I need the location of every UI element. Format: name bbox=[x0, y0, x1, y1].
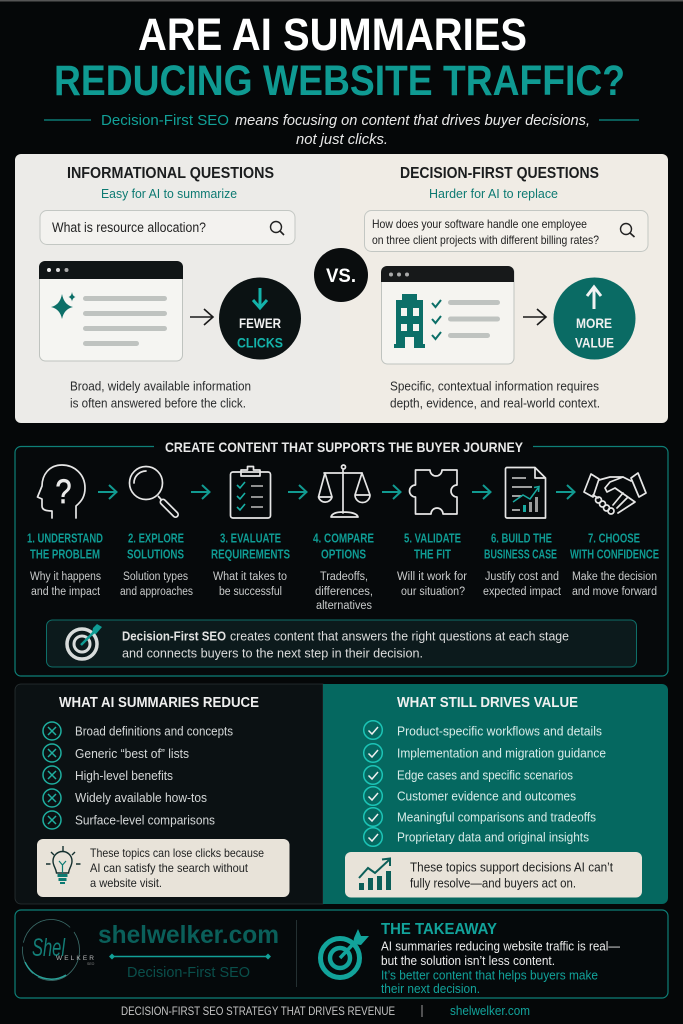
footer: DECISION-FIRST SEO STRATEGY THAT DRIVES REVENUE bbox=[121, 1004, 395, 1018]
panel: decision-first questions bbox=[340, 154, 668, 423]
subtitle: Decision-First SEO bbox=[101, 112, 229, 129]
subtitle: means focusing on content that drives buyer decisions, bbox=[235, 112, 590, 129]
step 1: THE PROBLEM bbox=[30, 548, 100, 562]
step 4: OPTIONS bbox=[321, 548, 366, 562]
arrow: step 4 to 5 bbox=[382, 485, 400, 499]
arrow: to more value bbox=[523, 309, 546, 325]
step 7: 7. CHOOSE bbox=[588, 532, 640, 546]
takeaway text: AI summaries reducing website traffic is real— bbox=[381, 938, 620, 954]
step 5: our situation? bbox=[401, 586, 465, 598]
panel: what still drives value bbox=[323, 684, 668, 904]
arrow: step 1 to 2 bbox=[98, 485, 116, 499]
browser window: specific content bbox=[381, 266, 514, 364]
heading: reduce: WHAT AI SUMMARIES REDUCE bbox=[59, 695, 259, 711]
logo: Shel Welker: Shel bbox=[32, 934, 66, 962]
step 6: Justify cost and bbox=[485, 571, 559, 583]
text: decision-first note: depth, evidence, and real-world context. bbox=[390, 396, 600, 410]
callout: lose clicks bbox=[37, 839, 290, 897]
list: value items bbox=[364, 721, 606, 846]
step 7: Make the decision bbox=[572, 571, 657, 583]
step 5: THE FIT bbox=[414, 548, 451, 562]
panel: buyer journey bbox=[15, 439, 668, 676]
list: reduced items: Broad definitions and concepts bbox=[75, 724, 233, 738]
step 1: Why it happens bbox=[30, 571, 101, 583]
icon: head with question mark: ? bbox=[56, 473, 72, 511]
search box: decision-first: on three client projects with different billing rates? bbox=[372, 233, 599, 247]
callout: decision-first SEO: and connects buyers to the next step in their decision. bbox=[122, 646, 423, 660]
subheading: harder: Harder for AI to replace bbox=[429, 186, 558, 201]
list: value items: Meaningful comparisons and tradeoffs bbox=[397, 810, 596, 824]
heading: buyer journey: CREATE CONTENT THAT SUPPORTS THE BUYER JOURNEY bbox=[165, 439, 524, 455]
arrow: step 3 to 4 bbox=[288, 485, 306, 499]
callout: decision-first SEO bbox=[46, 620, 636, 667]
panel: informational questions bbox=[15, 154, 340, 423]
step 2: and approaches bbox=[120, 586, 193, 598]
step 7: and move forward bbox=[572, 586, 657, 598]
icon: balance scale bbox=[318, 465, 370, 517]
step 4 bbox=[313, 532, 374, 612]
panel: takeaway banner bbox=[15, 910, 668, 998]
step 2 bbox=[120, 532, 193, 598]
badge: fewer clicks: CLICKS bbox=[237, 334, 283, 350]
step 3: REQUIREMENTS bbox=[211, 548, 290, 562]
takeaway text: their next decision. bbox=[381, 981, 480, 996]
takeaway text: It’s better content that helps buyers make bbox=[381, 968, 598, 982]
callout: support decisions: These topics support decisions AI can’t bbox=[410, 860, 613, 874]
step 5 bbox=[397, 532, 467, 598]
badge: fewer clicks bbox=[219, 278, 301, 360]
badge: fewer clicks: FEWER bbox=[239, 315, 281, 331]
takeaway text bbox=[381, 921, 620, 996]
step 3: 3. EVALUATE bbox=[220, 532, 281, 546]
list: reduced items bbox=[43, 722, 233, 829]
list: value items: Proprietary data and original insights bbox=[397, 830, 589, 844]
takeaway text: but the solution isn’t less content. bbox=[381, 953, 555, 968]
takeaway text: THE TAKEAWAY bbox=[381, 921, 497, 938]
icon: takeaway target bbox=[320, 929, 369, 978]
step 4: 4. COMPARE bbox=[313, 532, 374, 546]
step 5: 5. VALIDATE bbox=[404, 532, 461, 546]
divider line with diamonds bbox=[109, 954, 271, 960]
callout: lose clicks: These topics can lose clicks because bbox=[90, 846, 264, 860]
badge: VS bbox=[314, 248, 368, 302]
list: value items: Customer evidence and outcomes bbox=[397, 790, 576, 804]
logo: Shel Welker: SEO bbox=[87, 962, 95, 966]
step 3: What it takes to bbox=[213, 571, 287, 583]
badge: more value: MORE bbox=[576, 315, 612, 331]
step 3 bbox=[211, 532, 290, 598]
step 5: Will it work for bbox=[397, 571, 467, 583]
icon: puzzle piece bbox=[410, 470, 457, 514]
title bbox=[54, 9, 625, 105]
step 4: differences, bbox=[315, 586, 373, 598]
panel: what AI summaries reduce bbox=[15, 684, 323, 904]
icon: head with question mark bbox=[38, 465, 85, 518]
heading: decision-first: DECISION-FIRST QUESTIONS bbox=[400, 165, 599, 182]
icon: clipboard checklist bbox=[230, 466, 270, 518]
step 3: be successful bbox=[219, 586, 282, 598]
brand: shelwelker.com: shelwelker.com bbox=[98, 921, 279, 949]
badge: more value: VALUE bbox=[575, 334, 614, 350]
subtitle bbox=[44, 112, 639, 148]
search box: decision-first bbox=[364, 210, 648, 252]
step 2: 2. EXPLORE bbox=[128, 532, 184, 546]
title: ARE AI SUMMARIES bbox=[138, 9, 527, 60]
search box: informational: What is resource allocation? bbox=[52, 220, 206, 235]
arrow: to fewer clicks bbox=[190, 309, 213, 325]
icon: target bbox=[67, 624, 102, 659]
text: informational note bbox=[70, 380, 251, 410]
icon: handshake bbox=[584, 473, 646, 514]
list: reduced items: Generic “best of” lists bbox=[75, 747, 189, 761]
step 6 bbox=[483, 532, 562, 598]
text: informational note: Broad, widely available information bbox=[70, 380, 251, 394]
step 4: Tradeoffs, bbox=[320, 571, 368, 583]
callout: support decisions bbox=[345, 852, 642, 898]
heading: value: WHAT STILL DRIVES VALUE bbox=[397, 695, 578, 711]
step 6: 6. BUILD THE bbox=[491, 532, 552, 546]
icon: magnifying glass bbox=[130, 466, 176, 514]
icon: light bulb bbox=[46, 846, 80, 884]
arrow: step 2 to 3 bbox=[191, 485, 210, 499]
text: decision-first note: Specific, contextual information requires bbox=[390, 380, 599, 394]
search box: decision-first: How does your software handle one employee bbox=[372, 217, 587, 231]
arrow: step 5 to 6 bbox=[472, 485, 490, 499]
list: reduced items: High-level benefits bbox=[75, 769, 173, 783]
list: value items: Product-specific workflows and details bbox=[397, 724, 602, 738]
icon: business case document bbox=[506, 468, 546, 518]
browser window: AI summary bbox=[39, 261, 183, 361]
list: reduced items: Widely available how-tos bbox=[75, 791, 207, 805]
callout: support decisions: fully resolve—and buyers act on. bbox=[410, 876, 576, 890]
arrow: step 6 to 7 bbox=[556, 485, 574, 499]
step 6: expected impact bbox=[483, 586, 562, 598]
callout: decision-first SEO: creates content that answers the right questions at each stage bbox=[230, 628, 569, 644]
badge: VS: VS. bbox=[326, 266, 356, 287]
text: informational note: is often answered before the click. bbox=[70, 396, 246, 410]
icon: growth chart bbox=[359, 858, 391, 890]
step 1 bbox=[27, 532, 103, 598]
callout: decision-first SEO: Decision-First SEO bbox=[122, 628, 226, 644]
list: value items: Edge cases and specific scenarios bbox=[397, 768, 573, 782]
text: decision-first note bbox=[390, 380, 600, 410]
step 4: alternatives bbox=[316, 600, 372, 612]
logo: Shel Welker bbox=[22, 920, 95, 980]
callout: lose clicks: AI can satisfy the search without bbox=[90, 861, 249, 875]
step 2: SOLUTIONS bbox=[127, 548, 184, 562]
step 1: and the impact bbox=[31, 586, 101, 598]
list: reduced items: Surface-level comparisons bbox=[75, 814, 215, 828]
footer: shelwelker.com bbox=[450, 1004, 530, 1018]
callout: lose clicks: a website visit. bbox=[90, 876, 162, 890]
step 7 bbox=[570, 532, 659, 598]
heading: informational: INFORMATIONAL QUESTIONS bbox=[67, 165, 274, 182]
step 1: 1. UNDERSTAND bbox=[27, 532, 103, 546]
badge: more value bbox=[554, 278, 636, 360]
step 2: Solution types bbox=[123, 571, 188, 583]
brand tagline: Decision-First SEO bbox=[127, 964, 250, 981]
search box: informational bbox=[40, 210, 295, 244]
subtitle: not just clicks. bbox=[296, 131, 388, 148]
subheading: easy: Easy for AI to summarize bbox=[101, 186, 237, 201]
list: value items: Implementation and migration guidance bbox=[397, 746, 606, 760]
logo: Shel Welker: WELKER bbox=[56, 955, 94, 962]
step 6: BUSINESS CASE bbox=[484, 548, 557, 562]
